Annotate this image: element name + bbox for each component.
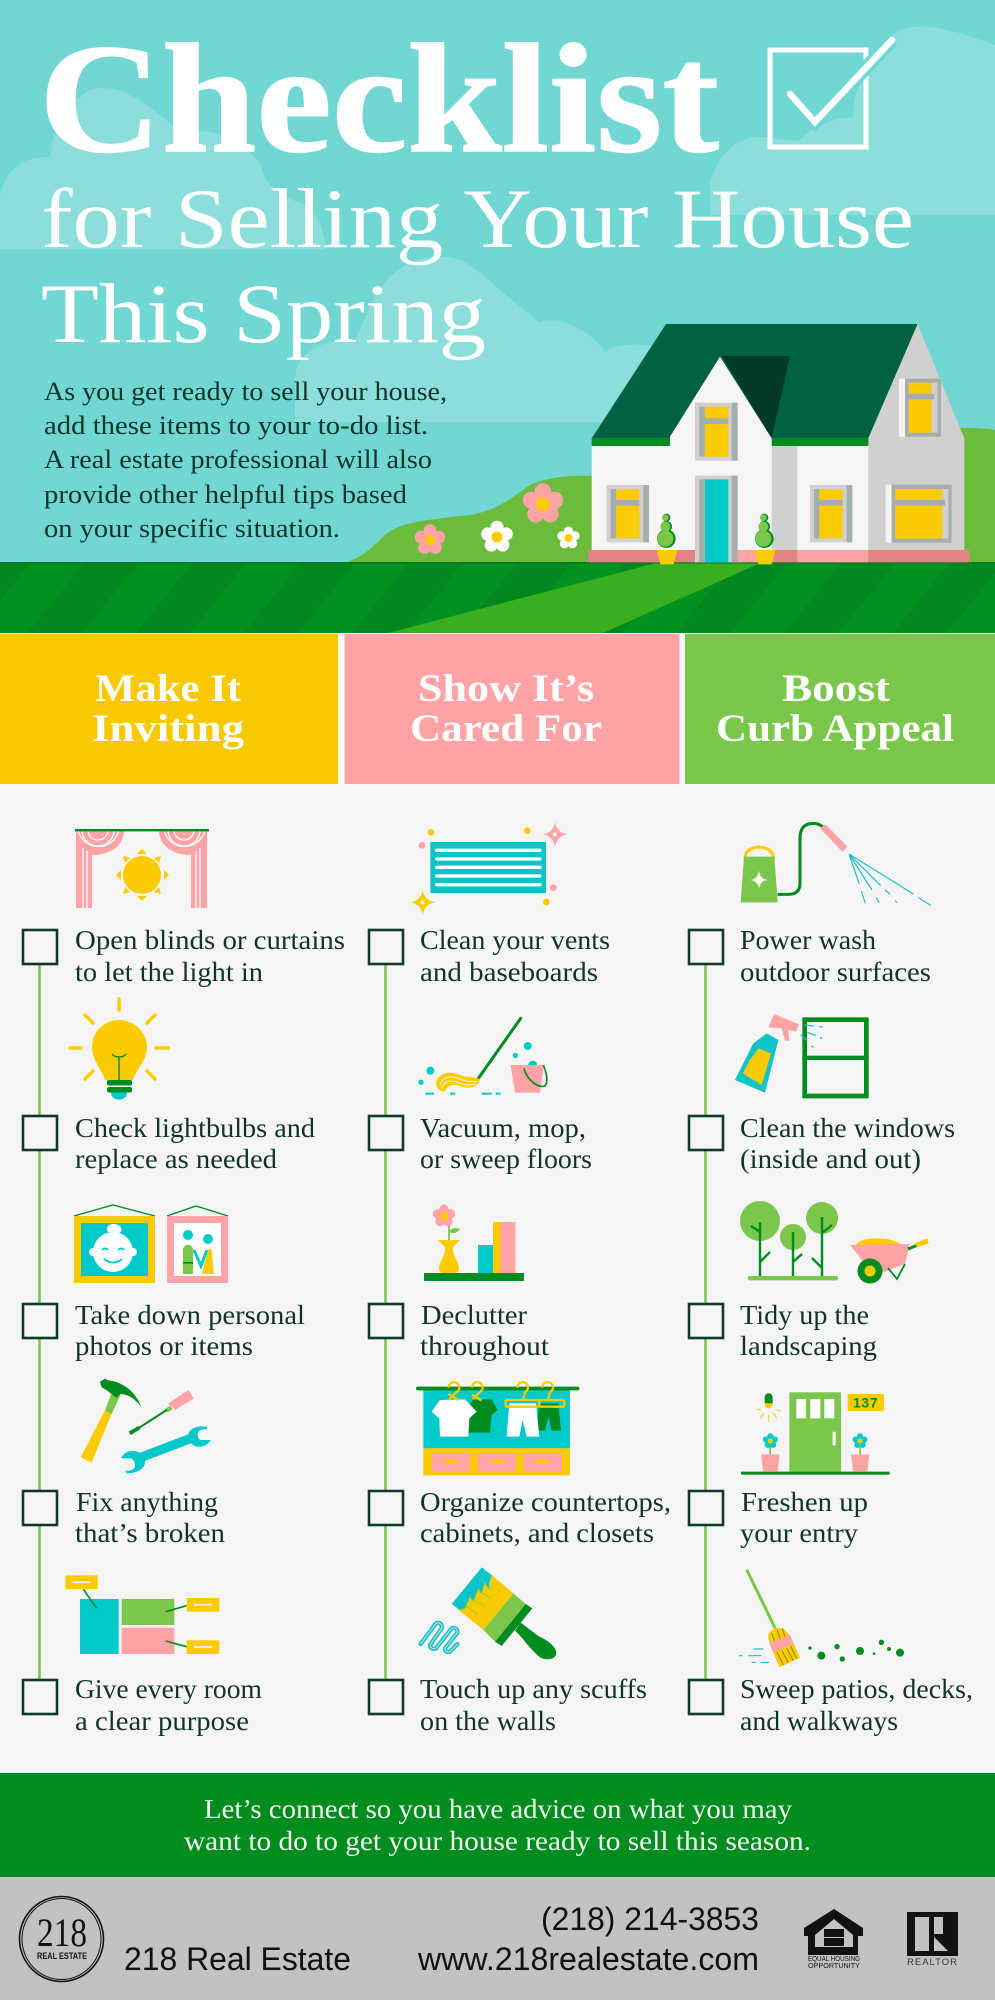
icon: clean vent (410, 822, 568, 915)
text: Power wash (740, 925, 931, 987)
text: Sweep patios: Sweep patios, decks, (740, 1674, 973, 1704)
wing lower window (886, 485, 952, 543)
text: Tidy up the landscaping: Tidy up the (740, 1300, 869, 1330)
text: Freshen up your entry: your entry (740, 1518, 859, 1548)
text: Open blinds or curtains (75, 925, 345, 987)
title: Checklist: Checklist (39, 12, 719, 185)
text: Sweep patios: and walkways (740, 1706, 898, 1736)
intro paragraph: As you get ready to sell your house, (44, 377, 447, 406)
text: Declutter (420, 1300, 550, 1361)
text: Vacuum, mop: or sweep floors (420, 1144, 592, 1174)
icon: room labels (65, 1575, 219, 1654)
call to action banner: want to do to get your house ready to sell this season. (184, 1826, 811, 1856)
icon: power washer (741, 823, 931, 905)
text: Take down personal (75, 1300, 305, 1361)
text: Declutter: throughout (420, 1331, 550, 1361)
checkbox (23, 1304, 57, 1338)
lower middle window (810, 485, 852, 542)
panel: Boost Curb Appeal: Boost (782, 667, 890, 710)
text: Touch up any scuffs: on the walls (420, 1706, 556, 1736)
text: Give every room (75, 1674, 262, 1736)
checkbox (689, 1304, 723, 1338)
logo: 218 Real Estate (20, 1896, 104, 1982)
text: Declutter: Declutter (421, 1300, 527, 1330)
checkbox (369, 1116, 403, 1150)
intro paragraph (44, 377, 447, 543)
text: Power wash: outdoor surfaces (740, 957, 931, 987)
panel: Make It Inviting: Make It (95, 667, 241, 710)
icon: tools (81, 1379, 211, 1473)
text: Freshen up your entry (740, 1487, 868, 1548)
text: Clean your vents: and baseboards (420, 957, 598, 987)
icon: shelf with vase and books (424, 1205, 524, 1281)
text: Touch up any scuffs: Touch up any scuffs (420, 1674, 647, 1704)
title: This Spring: This Spring (41, 267, 486, 361)
checkbox (23, 930, 57, 964)
hero background: sky (0, 0, 995, 634)
panel: column 3 checklist (689, 823, 973, 1736)
panel: Make It Inviting (0, 634, 338, 784)
phone number: (218) 214-3853 (541, 1901, 759, 1937)
icon: title checkbox (770, 40, 892, 147)
flowers (415, 483, 580, 554)
checkbox (23, 1680, 57, 1714)
panel: column 2 checklist (369, 822, 671, 1736)
icon: mop and bucket (418, 1018, 547, 1094)
icon: front entry: 137 (853, 1395, 878, 1411)
panel: Show It's Cared For: Cared For (410, 707, 602, 750)
text: Give every room: Give every room (75, 1674, 262, 1704)
logo: 218 Real Estate: 218 (37, 1910, 87, 1955)
intro paragraph: A real estate professional will also (44, 445, 432, 474)
website: www.218realestate.com (417, 1941, 759, 1977)
text: Check lightbulbs (75, 1113, 316, 1174)
checklist background (0, 784, 995, 1773)
checkbox (23, 1491, 57, 1525)
text: Tidy up the landscaping: landscaping (740, 1331, 877, 1361)
footer panel (0, 1877, 995, 2000)
icon: realtor (907, 1912, 958, 1968)
icon: framed photos (74, 1205, 228, 1283)
house illustration (588, 324, 969, 564)
checkbox (689, 930, 723, 964)
text: Take down personal: photos or items (75, 1331, 253, 1361)
text: Check lightbulbs: replace as needed (75, 1144, 278, 1174)
checkbox (369, 1491, 403, 1525)
intro paragraph: add these items to your to-do list. (44, 411, 428, 440)
icon: trees and wheelbarrow (740, 1201, 928, 1284)
upper window (695, 403, 738, 461)
intro paragraph: on your specific situation. (44, 514, 340, 543)
checkbox (369, 1304, 403, 1338)
icon: equal housing opportunity: EQUAL HOUSING (808, 1956, 860, 1963)
front door (695, 476, 738, 562)
icon: realtor: REALTOR (907, 1957, 957, 1968)
icon: equal housing opportunity (804, 1909, 863, 1970)
panel: Show It's Cared For (344, 634, 680, 784)
text: Sweep patios (740, 1674, 973, 1736)
intro paragraph: provide other helpful tips based (44, 480, 407, 509)
checkbox (689, 1116, 723, 1150)
agent name: 218 Real Estate (124, 1941, 351, 1977)
text: Check lightbulbs: Check lightbulbs and (75, 1113, 316, 1143)
text: Fix anything: that’s broken (75, 1518, 226, 1548)
checkbox (689, 1491, 723, 1525)
icon: closet with clothes and drawers (416, 1382, 579, 1475)
icon: lightbulb (70, 999, 168, 1100)
text: Vacuum, mop: Vacuum, mop, (420, 1113, 586, 1143)
topiary right (755, 514, 775, 564)
text: Clean your vents (420, 925, 610, 987)
panel: Make It Inviting: Inviting (92, 707, 245, 750)
text: Take down personal: Take down personal (75, 1300, 305, 1330)
text: Open blinds or curtains: Open blinds or curtains (75, 925, 345, 955)
checkbox (369, 930, 403, 964)
hills (345, 428, 995, 563)
title: for Selling Your House: for Selling Your House (41, 172, 914, 266)
lower left window (607, 485, 649, 542)
text: Organize countertops: cabinets, and closets (420, 1518, 654, 1548)
panel: column 1 checklist (23, 829, 345, 1736)
text: Power wash: Power wash (740, 925, 877, 955)
text: Open blinds or curtains: to let the light in (75, 957, 264, 987)
text: Clean your vents: Clean your vents (420, 925, 610, 955)
icon: curtains and sun (75, 829, 209, 908)
text: Tidy up the landscaping (740, 1300, 877, 1361)
call to action banner: Let’s connect so you have advice on what you may (204, 1794, 793, 1824)
text: Clean the windows (740, 1113, 955, 1174)
text: Clean the windows: (inside and out) (740, 1144, 921, 1174)
panel: Boost Curb Appeal: Curb Appeal (716, 707, 954, 750)
text: Freshen up your entry: Freshen up (741, 1487, 868, 1517)
text: Fix anything (75, 1487, 226, 1548)
clouds (0, 26, 995, 422)
column header bands background (0, 633, 995, 784)
icon: front entry (741, 1392, 890, 1475)
logo: 218 Real Estate: REAL ESTATE (37, 1951, 87, 1962)
icon: broom and debris (739, 1571, 904, 1667)
text: Organize countertops: Organize countertops, (420, 1487, 671, 1517)
panel: Show It's Cared For: Show It’s (418, 667, 594, 710)
checkbox (369, 1680, 403, 1714)
text: Vacuum, mop (420, 1113, 592, 1174)
icon: spray bottle and window (735, 1014, 869, 1096)
text: Clean the windows: Clean the windows (740, 1113, 955, 1143)
call to action banner (0, 1773, 995, 1877)
wing upper window (899, 379, 941, 437)
checkbox (23, 1116, 57, 1150)
topiary left (657, 514, 677, 564)
panel: Boost Curb Appeal (685, 634, 995, 784)
lawn (0, 562, 995, 633)
icon: equal housing opportunity: OPPORTUNITY (808, 1963, 860, 1970)
text: Touch up any scuffs (420, 1674, 647, 1736)
checkbox (689, 1680, 723, 1714)
icon: paint brush (421, 1567, 556, 1659)
text: Fix anything: Fix anything (76, 1487, 218, 1517)
text: Give every room: a clear purpose (75, 1706, 249, 1736)
text: Organize countertops (420, 1487, 671, 1548)
